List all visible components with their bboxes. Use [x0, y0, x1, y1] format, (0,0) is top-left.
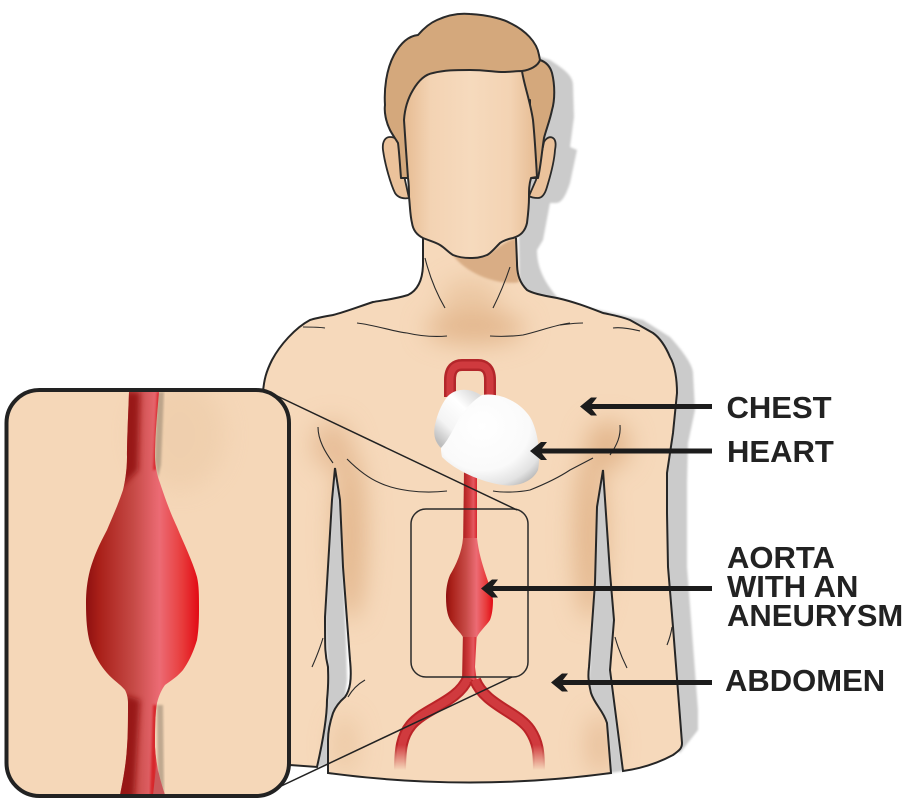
label: aorta with an aneurysm: [727, 540, 903, 633]
stem highlights and split: [150, 392, 160, 800]
aortic arch: [450, 365, 490, 397]
arrow: abdomen: [551, 674, 712, 692]
arrow: aorta: [481, 580, 712, 598]
zoom box on body: [411, 509, 528, 677]
zoom connector lines: [275, 395, 517, 788]
lower aorta neck: [462, 630, 477, 682]
label: chest: CHEST: [726, 390, 832, 425]
hair flap: [522, 60, 540, 71]
neck, chest and muscle lines: [303, 258, 672, 697]
heart back lobe: [434, 390, 482, 448]
right ear: [529, 137, 556, 198]
label: aorta with an aneurysm: ANEURYSM: [727, 598, 903, 633]
face: [404, 70, 537, 258]
label: abdomen: ABDOMEN: [725, 663, 885, 698]
arrow: chest: [580, 398, 712, 416]
label: heart: HEART: [727, 434, 834, 469]
descending aorta: [463, 470, 477, 550]
heart main: [441, 394, 539, 485]
figure: torso and arms: [263, 238, 682, 782]
iliac arteries: [400, 678, 539, 772]
label: aorta with an aneurysm: AORTA: [727, 540, 835, 575]
inset border: [6, 390, 289, 796]
body outline: [263, 238, 682, 782]
aorta and heart: [400, 365, 539, 772]
inset: magnified aneurysm: [6, 380, 289, 800]
magnified artery: [86, 392, 199, 795]
left ear: [383, 137, 409, 198]
label: aorta with an aneurysm: WITH AN: [727, 569, 858, 604]
figure: head and hair: [383, 14, 556, 258]
body shadow: [317, 57, 698, 773]
inset skin shading: [162, 392, 212, 476]
arrow: heart: [530, 442, 712, 460]
aneurysm bulge: [446, 538, 493, 637]
hair: [385, 14, 554, 178]
neck shadow: [452, 238, 519, 283]
artery side shadow: [155, 392, 164, 795]
stem dark sides: [115, 392, 140, 800]
body shading: [312, 278, 630, 775]
